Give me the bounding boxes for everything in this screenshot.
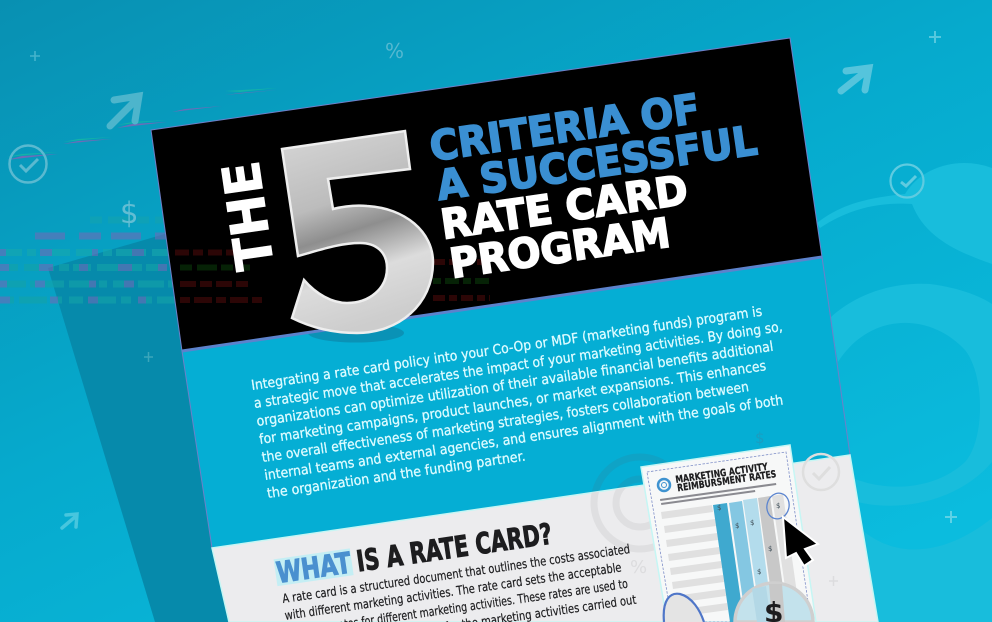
title line: PROGRAM: PROGRAM	[447, 209, 673, 288]
background icon: check circle left	[10, 146, 46, 182]
intro text block: organizations can optimize utilization of their available financial benefits additional	[256, 339, 774, 430]
background icon: plus	[929, 31, 941, 43]
decorative check circle	[803, 454, 839, 490]
card column dollar signs: $	[768, 545, 772, 553]
card small print	[660, 483, 776, 505]
card rate columns	[713, 494, 801, 622]
title line: RATE CARD: RATE CARD	[438, 166, 691, 249]
background icon: arrow up-right left side	[110, 96, 139, 126]
blue ellipse highlight	[766, 492, 790, 520]
small dollar on blue: $	[755, 429, 765, 447]
page shadow	[48, 233, 228, 622]
intro text block: the overall effectiveness of marketing strategies, fosters collaboration between	[261, 379, 750, 466]
pie oval bottom left	[663, 594, 704, 622]
background icon: dollar: $	[120, 196, 138, 230]
title line: A SUCCESSFUL: A SUCCESSFUL	[434, 116, 760, 210]
intro text block: the organization and the funding partner.	[266, 449, 527, 502]
card column dollar signs: $	[776, 502, 780, 510]
intro text block: for marketing campaigns, product launches, or market expansions. This enhances	[258, 358, 767, 448]
glitch bands	[0, 220, 190, 300]
rings on blue	[594, 457, 686, 549]
card dashed border	[647, 452, 811, 622]
intro text block: Integrating a rate card policy into your Co-Op or MDF (marketing funds) program is	[250, 304, 763, 394]
card title	[676, 462, 776, 492]
decorative plus	[829, 576, 838, 586]
background icon: plus	[144, 352, 153, 362]
background icon: plus	[30, 51, 40, 61]
heading: what is a rate card	[273, 517, 554, 590]
paragraph: what is a rate card: A rate card is a structured document that outlines the costs associated	[281, 541, 631, 606]
shadow under numeral	[308, 324, 404, 342]
heading: title text	[427, 85, 760, 288]
card gray rows	[661, 505, 728, 617]
intro text block: internal teams and external agencies, and ensures alignment with the goals of both	[263, 393, 784, 484]
title line: CRITERIA OF: CRITERIA OF	[427, 85, 703, 171]
card column dollar signs: $	[757, 568, 761, 576]
intro text block: a strategic move that accelerates the impact of your marketing activities. By doing so,	[253, 319, 784, 412]
heading word: WHAT: WHAT	[274, 546, 353, 590]
card title: REIMBURSMENT RATES	[677, 469, 777, 494]
background icon: percent: %	[385, 39, 404, 63]
background icon: plus	[945, 511, 957, 523]
background icon: arrow small	[62, 514, 77, 528]
heading words: IS A RATE CARD?: IS A RATE CARD?	[354, 517, 554, 578]
magnifier	[735, 583, 813, 622]
numeral 5	[282, 131, 433, 333]
card title: MARKETING ACTIVITY	[675, 462, 769, 486]
background icon: arrow up-right right side	[841, 68, 869, 91]
background icon: check circle right	[890, 164, 924, 198]
header bottom edge	[182, 257, 822, 351]
panel: page blue body	[182, 257, 850, 548]
paragraph: what is a rate card: with different marketing activities. The rate card sets the acceptable	[284, 559, 623, 622]
card column dollar signs: $	[735, 522, 739, 530]
document card: reimbursement rates	[641, 445, 818, 622]
heading: THE: THE	[212, 157, 287, 274]
background blobs	[817, 163, 992, 622]
card column dollar signs: $	[750, 519, 754, 527]
card sheet	[641, 445, 816, 622]
glitch slivers	[7, 88, 277, 160]
card logo	[658, 479, 670, 491]
decorative percent: %	[630, 557, 647, 578]
intro text block	[250, 301, 797, 502]
cursor arrow	[783, 517, 818, 566]
decorative rings	[590, 488, 654, 552]
panel: white section	[212, 455, 878, 622]
panel: black header	[151, 38, 822, 351]
card column dollar signs	[717, 502, 780, 576]
glitch on header	[175, 252, 490, 300]
highlight behind WHAT	[274, 548, 354, 586]
card column dollar signs: $	[717, 504, 721, 512]
